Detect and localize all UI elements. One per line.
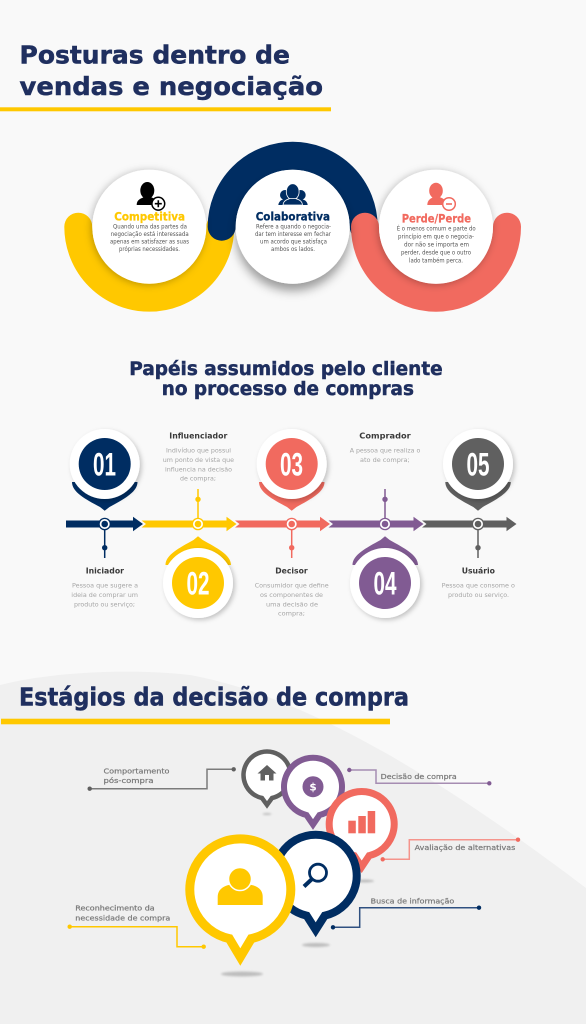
step 05: Pessoa que consome o <box>442 582 515 590</box>
title: papéis <box>129 358 443 400</box>
text: perde/perde: perder, desde que o outro <box>401 250 471 257</box>
text: colaborativa: ambos os lados. <box>271 246 315 253</box>
step 05: 05 <box>466 446 490 482</box>
title: posturas: vendas e negociação <box>20 72 323 101</box>
pin: purple dollar <box>284 758 342 824</box>
connector: reconhecimento da necessidade: necessidade de compra <box>75 913 170 922</box>
connector: comportamento pós-compra <box>88 766 236 791</box>
step 02: Indivíduo que possui <box>166 447 231 455</box>
text: competitiva: próprias necessidades. <box>119 246 180 253</box>
step 02 <box>163 432 234 618</box>
step 04: ato de compra; <box>360 456 410 464</box>
text: perde/perde: princípio em que o negocia- <box>398 234 474 241</box>
step 03: Decisor <box>275 567 308 576</box>
title underline <box>1 719 390 724</box>
text: colaborativa: Refere a quando o negocia- <box>256 223 331 230</box>
step 01: ideia de comprar um <box>71 591 138 599</box>
step 05 <box>442 429 515 599</box>
title: posturas: Posturas dentro de <box>20 40 290 70</box>
step 03: os componentes de <box>260 591 323 599</box>
connector: reconhecimento da necessidade <box>68 904 206 949</box>
step 04 <box>350 432 420 618</box>
connector: comportamento pós-compra: Comportamento <box>104 766 170 775</box>
step 03: compra; <box>278 610 305 618</box>
step 04: 04 <box>374 565 397 601</box>
timeline <box>66 429 516 618</box>
step 03: 03 <box>280 446 303 482</box>
text: perde/perde: dor não se importa em <box>404 242 469 249</box>
title: papéis: no processo de compras <box>162 378 414 400</box>
step 03 <box>255 429 329 618</box>
connector: busca de informação <box>331 896 481 930</box>
arrows <box>66 517 516 531</box>
pin: navy search <box>275 835 357 930</box>
connector: avaliação de alternativas: Avaliação de alternativas <box>415 843 516 852</box>
step 01: Iniciador <box>86 567 124 576</box>
pin: coral chart <box>329 791 394 867</box>
step 05: produto ou serviço. <box>448 591 509 599</box>
step 02: 02 <box>186 565 210 601</box>
yellow arc <box>78 227 220 298</box>
step 01: Pessoa que sugere a <box>72 582 138 590</box>
icon: group <box>278 184 308 205</box>
step 02: um ponto de vista que <box>163 456 234 464</box>
title: estágios: Estágios da decisão de compra <box>19 683 409 712</box>
connector: busca de informação: Busca de informação <box>371 896 454 905</box>
connector: avaliação de alternativas <box>380 838 520 862</box>
navy arc <box>222 156 364 227</box>
text: perde/perde: lado também perca. <box>409 258 463 265</box>
step 02: Influenciador <box>169 432 227 441</box>
connector: reconhecimento da necessidade: Reconhecimento da <box>75 904 155 913</box>
lower background shape <box>0 672 586 1024</box>
pin: yellow user <box>190 839 291 957</box>
text: competitiva <box>110 223 189 253</box>
step 01: produto ou serviço; <box>74 600 135 608</box>
connector: comportamento pós-compra: pós-compra <box>104 776 154 785</box>
text: colaborativa: dar tem interesse em fechar <box>255 231 331 238</box>
heading: competitiva: Competitiva <box>114 210 185 224</box>
text: perde/perde <box>397 225 476 265</box>
title: posturas <box>20 40 323 101</box>
step 04: A pessoa que realiza o <box>350 447 420 455</box>
step 03: uma decisão de <box>266 600 318 608</box>
pin: purple dollar: $ <box>309 782 317 794</box>
heading: perde/perde: Perde/Perde <box>402 212 471 226</box>
icon: user plus <box>137 182 165 210</box>
card: competitiva <box>92 170 206 284</box>
text: colaborativa: um acordo que satisfaça <box>260 239 327 246</box>
panel: decision stages <box>68 752 520 976</box>
text: competitiva: Quando uma das partes da <box>113 223 187 230</box>
step 04: Comprador <box>359 432 411 441</box>
connector: decisão de compra: Decisão de compra <box>381 772 457 781</box>
pin shadows <box>221 813 374 976</box>
step 03: Consumidor que define <box>255 582 329 590</box>
step 05: Usuário <box>462 567 495 576</box>
text: competitiva: apenas em satisfazer as suas <box>110 239 189 246</box>
text: competitiva: negociação está interessada <box>111 231 189 238</box>
title underline <box>0 107 331 111</box>
icon: user minus <box>427 183 455 210</box>
card: colaborativa <box>236 170 350 284</box>
step 01 <box>70 429 140 608</box>
title: papéis: Papéis assumidos pelo cliente <box>129 358 443 380</box>
heading: colaborativa: Colaborativa <box>256 210 330 224</box>
pin: grey home <box>244 752 290 805</box>
text: perde/perde: É o menos comum e parte do <box>397 225 476 233</box>
step 02: influencia na decisão <box>165 465 232 473</box>
coral arc <box>365 227 507 298</box>
step 01: 01 <box>93 446 116 482</box>
text: colaborativa <box>255 223 331 253</box>
connector: decisão de compra <box>347 768 491 786</box>
card: perde/perde <box>379 170 493 284</box>
step 02: de compra; <box>180 475 216 483</box>
panel: three postures <box>78 156 507 298</box>
